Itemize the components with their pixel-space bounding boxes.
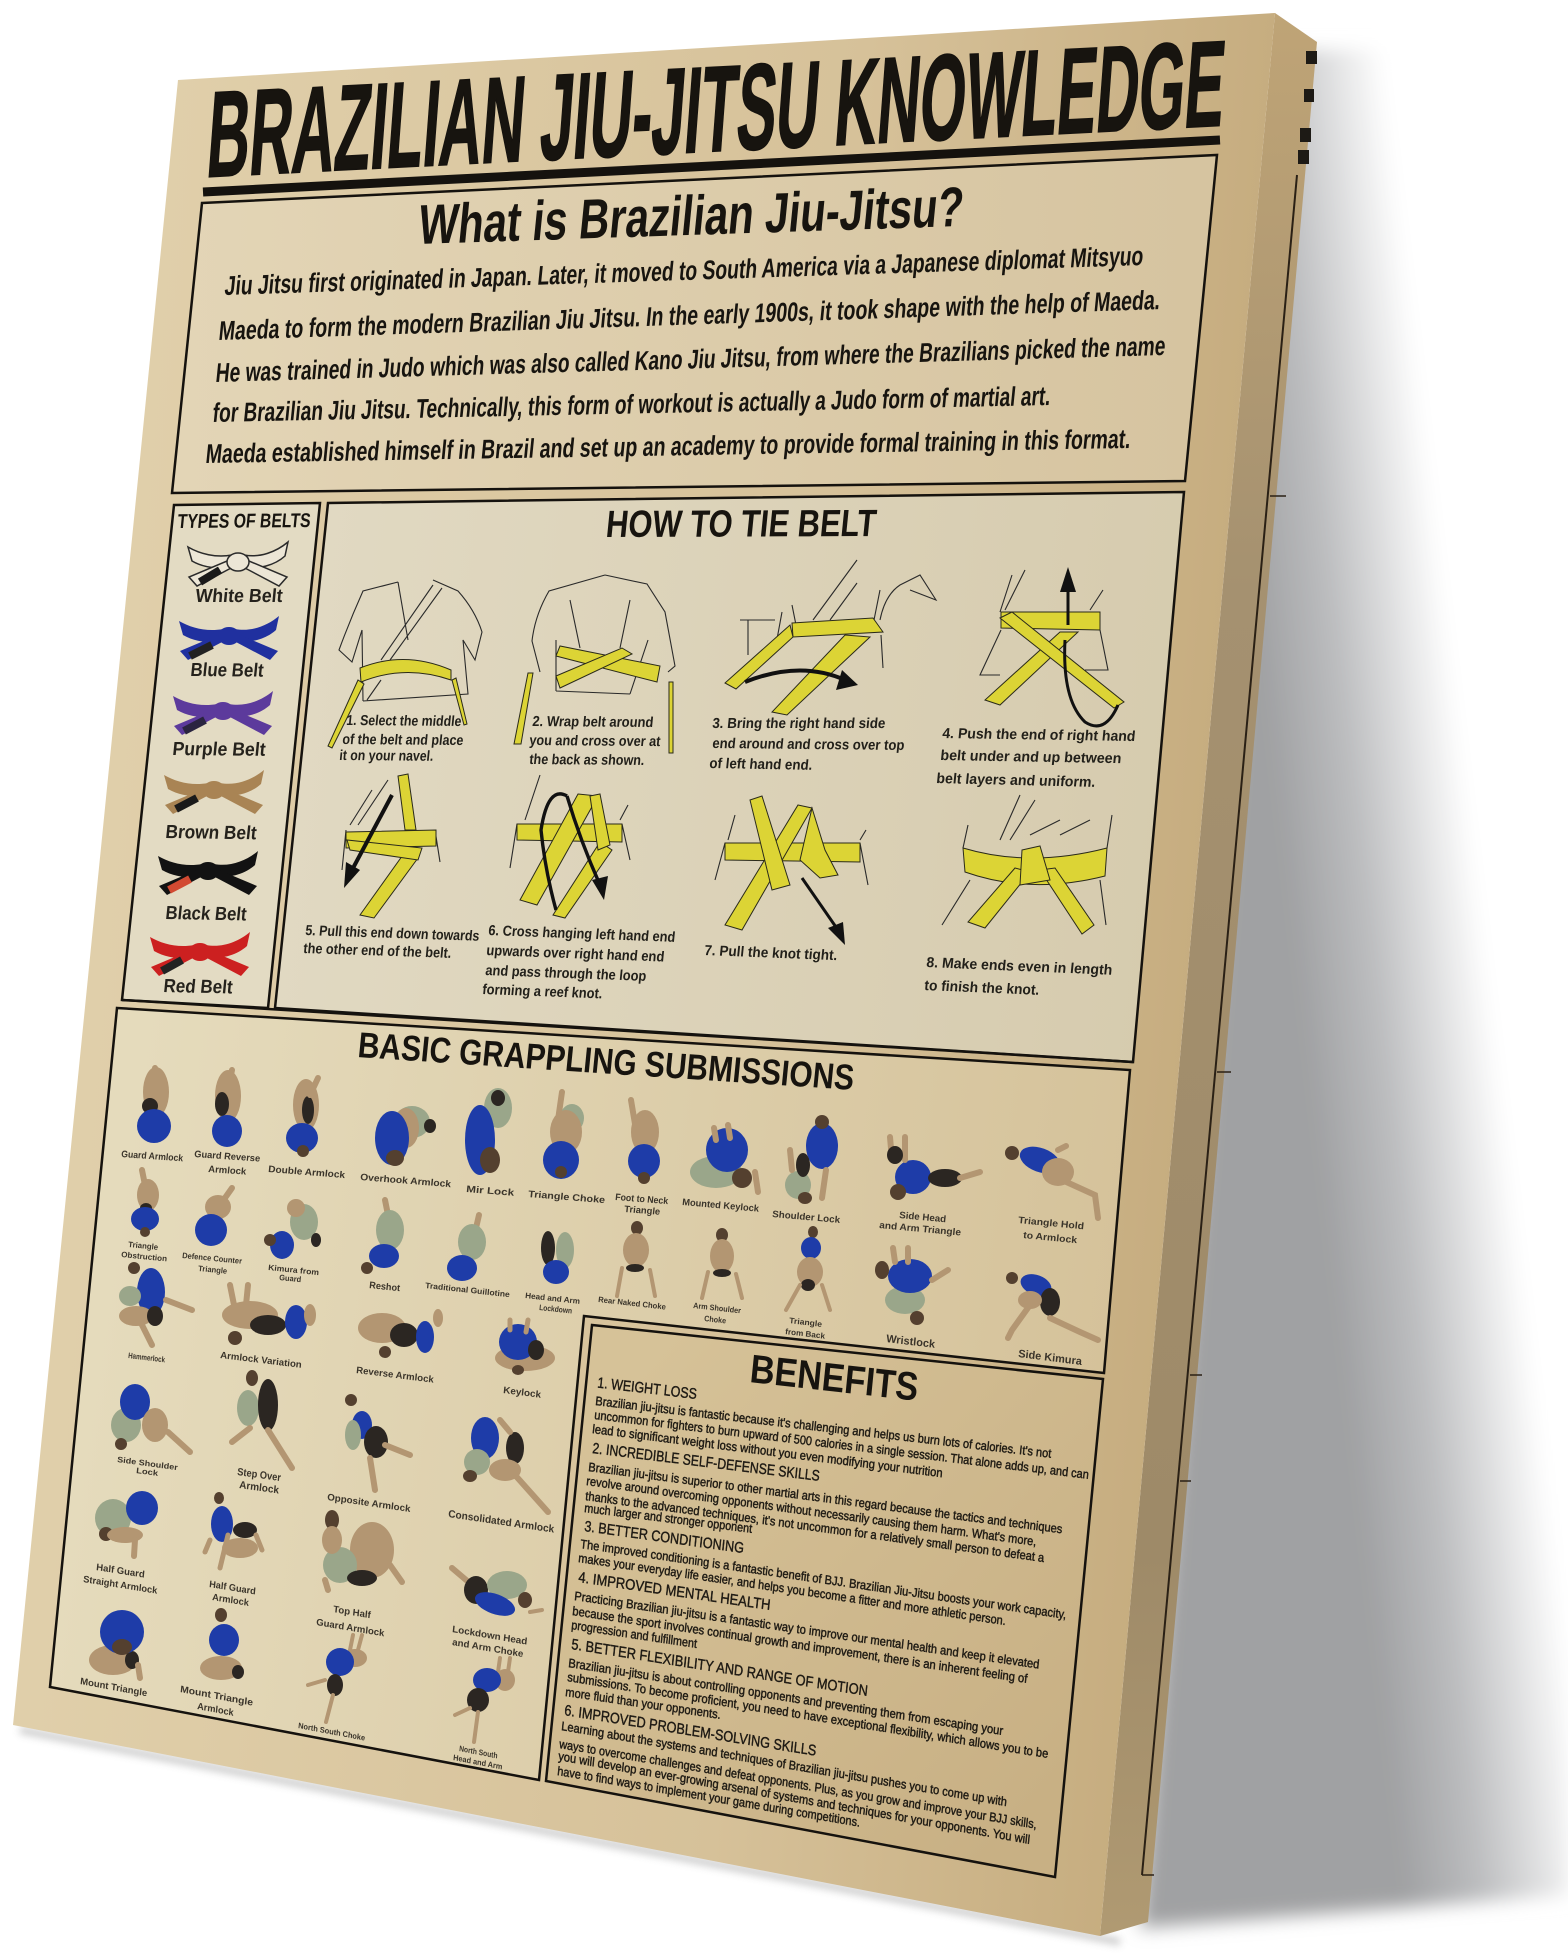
figure: shoulder lock [772,1115,841,1226]
figure: side kimura: Side Kimura [1018,1348,1083,1368]
figure: north south choke [298,1635,367,1743]
figure: guard reverse armlock: Armlock [208,1164,247,1178]
step 4 [936,567,1136,791]
figure: armlock variation: Armlock Variation [220,1350,302,1371]
benefit 5: submissions. To become proficient, you need to have exceptional flexibility, which allows you to be [567,1670,1049,1761]
panel: types of belts [122,503,320,1008]
step 2: you and cross over at [529,733,661,750]
step 4: belt layers and uniform. [936,771,1096,791]
figure: half guard straight armlock [83,1491,159,1597]
benefit 6 [557,1702,1037,1847]
figure: opposite armlock: Opposite Armlock [327,1492,412,1515]
benefit 1: Brazilian jiu-jitsu is fantastic because it's challenging and helps us burn lots of calories. It's not [595,1394,1053,1461]
step 3 [709,560,936,774]
figure: double armlock: Double Armlock [268,1164,346,1181]
figure: consolidated armlock [448,1417,555,1536]
figure: mount triangle armlock [180,1608,254,1719]
step 4: belt under and up between [940,748,1122,767]
belt: red: Red Belt [163,976,234,998]
paragraph: Maeda to form the modern Brazilian Jiu Jitsu. In the early 1900s, it took shape with the help of Maeda. [217,284,1162,346]
panel: how to tie belt [275,492,1184,1062]
heading: what is: What is Brazilian Jiu-Jitsu? [416,175,967,256]
figure: traditional guillotine: Traditional Guillotine [425,1281,511,1299]
figure: triangle hold to armlock: Triangle Hold [1018,1215,1085,1232]
benefit 6: 6. IMPROVED PROBLEM-SOLVING SKILLS [564,1702,817,1760]
figure: traditional guillotine [425,1215,511,1299]
step 8: to finish the knot. [924,978,1040,999]
benefit 6: Learning about the systems and techniques of Brazilian jiu-jitsu pushes you to come up with [561,1719,1008,1809]
figure: side head and arm triangle: and Arm Triangle [879,1220,961,1239]
benefit 2: revolve around overcoming opponents without necessarily causing them harm. What's more, [586,1474,1037,1549]
figure: mount triangle armlock: Mount Triangle [180,1684,254,1709]
figure: mir lock [465,1088,516,1199]
belt: brown: Brown Belt [164,822,258,844]
figure: rear naked choke [598,1221,667,1312]
figure: lockdown head and arm choke [452,1568,542,1660]
belt: purple [172,691,273,761]
figure: reverse armlock: Reverse Armlock [356,1365,435,1386]
figure: half guard armlock: Half Guard [209,1579,256,1598]
heading: types of belts: TYPES OF BELTS [177,510,312,533]
figure: hammerlock [119,1262,192,1364]
figure: foot to neck triangle [615,1100,669,1218]
paragraph: He was trained in Judo which was also called Kano Jiu Jitsu, from where the Brazilians picked the name [214,330,1167,388]
step 6: and pass through the loop [485,963,647,985]
benefit 3: 3. BETTER CONDITIONING [584,1518,745,1557]
benefit 4: 4. IMPROVED MENTAL HEALTH [578,1569,771,1614]
figure: defence counter triangle [182,1188,242,1276]
step 7 [704,796,868,964]
figure: hammerlock: Hammerlock [128,1351,166,1364]
figure: head and arm lockdown [525,1231,580,1316]
benefit 5: more fluid than your opponents. [565,1685,721,1722]
figure: arm shoulder choke: Arm Shoulder [693,1301,741,1315]
figure: arm shoulder choke [693,1228,742,1325]
benefit 2: Brazilian jiu-jitsu is superior to other martial arts in this regard because the tactics and techniques [588,1460,1063,1536]
belt: purple: Purple Belt [172,739,267,761]
heading: how to tie belt: HOW TO TIE BELT [604,503,878,546]
figure: overhook armlock [360,1106,452,1190]
step 3: end around and cross over top [712,736,905,754]
figure: lockdown head and arm choke: Lockdown Head [452,1624,528,1648]
step 2 [514,575,675,769]
figure: north south head and arm: North South [459,1744,498,1760]
step 5: the other end of the belt. [303,941,452,962]
figure: arm shoulder choke: Choke [704,1314,727,1325]
step 4: 4. Push the end of right hand [942,726,1136,745]
figure: side shoulder lock: Side Shoulder [117,1455,178,1472]
figure: foot to neck triangle: Triangle [624,1204,661,1218]
figure: half guard straight armlock: Straight Armlock [83,1574,159,1597]
figure: keylock: Keylock [503,1385,542,1401]
figure: step over armlock: Step Over [237,1466,281,1484]
figure: guard armlock [121,1067,184,1164]
benefit 3: The improved conditioning is a fantastic benefit of BJJ. Brazilian Jiu-Jitsu boosts your work capacity, [580,1537,1067,1622]
benefit 4: Practicing Brazilian jiu-jitsu is a fantastic way to improve our mental health and keep it elevated [574,1589,1040,1672]
figure: side head and arm triangle [879,1137,980,1239]
figure: triangle from back: from Back [785,1327,826,1341]
heading: grappling: BASIC GRAPPLING SUBMISSIONS [356,1024,856,1098]
step 8: 8. Make ends even in length [926,955,1113,979]
belt: black: Black Belt [164,903,248,925]
benefit 1: uncommon for fighters to burn upward of 500 calories in a single session. That alone adds up, and can [594,1408,1090,1482]
step 2: the back as shown. [529,752,645,769]
belt: brown [164,770,264,844]
benefit 5: 5. BETTER FLEXIBILITY AND RANGE OF MOTION [571,1636,869,1700]
paragraph: for Brazilian Jiu Jitsu. Technically, this form of workout is actually a Judo form of martial art. [211,380,1052,428]
figure: mounted keylock: Mounted Keylock [682,1197,760,1215]
belt: white: White Belt [195,586,284,607]
figure: lockdown head and arm choke: and Arm Choke [452,1637,524,1660]
step 5 [303,774,480,962]
figure: reverse armlock [356,1309,443,1386]
benefit 5: Brazilian jiu-jitsu is about controlling opponents and preventing them from escaping your [568,1656,1004,1738]
figure: reshot [361,1200,404,1294]
figure: triangle hold to armlock [1005,1142,1098,1246]
figure: wristlock [875,1248,948,1351]
step 8 [924,795,1113,999]
step 6: upwards over right hand end [486,943,665,966]
belt: red [150,932,250,998]
figure: reshot: Reshot [369,1280,401,1294]
figure: triangle from back [785,1226,830,1341]
paragraph: Maeda established himself in Brazil and set up an academy to provide formal training in this format. [204,423,1132,469]
benefit 4: progression and fulfillment [571,1618,698,1651]
step 1 [328,580,482,765]
figure: guard reverse armlock: Guard Reverse [194,1149,261,1165]
figure: top half guard armlock: Top Half [333,1604,372,1621]
figure: mount triangle armlock: Armlock [197,1701,235,1719]
step 3: 3. Bring the right hand side [712,716,886,732]
figure: mount triangle [80,1610,148,1699]
figure: north south choke: North South Choke [298,1721,366,1743]
step 6 [482,775,676,1002]
figure: keylock [495,1320,555,1401]
heading: benefits: BENEFITS [748,1347,920,1410]
figure: triangle from back: Triangle [789,1316,823,1329]
step 6: forming a reef knot. [482,982,603,1002]
figure: consolidated armlock: Consolidated Armlock [448,1508,555,1536]
step 1: 1. Select the middle [346,713,462,730]
figure: defence counter triangle: Defence Counter [182,1251,242,1266]
figure: half guard armlock: Armlock [212,1592,250,1609]
figure: guard reverse armlock [194,1070,261,1178]
belt: blue: Blue Belt [190,660,265,682]
step 5: 5. Pull this end down towards [305,923,480,945]
canvas front face [13,13,1275,1936]
figure: top half guard armlock: Guard Armlock [316,1617,386,1639]
figure: side kimura [1006,1270,1098,1368]
step 7: 7. Pull the knot tight. [704,943,838,964]
belt: white [188,542,288,607]
step 1: it on your navel. [339,748,434,765]
panel: basic grappling submissions [50,1000,1133,1780]
paragraph: Jiu Jitsu first originated in Japan. Later, it moved to South America via a Japanese diplomat Mitsyuo [223,240,1145,301]
figure: side head and arm triangle: Side Head [899,1210,947,1225]
figure: wristlock: Wristlock [886,1333,936,1351]
benefit 2 [584,1440,1063,1565]
step 6: 6. Cross hanging left hand end [488,923,676,946]
canvas side face [1100,13,1317,1936]
figure: opposite armlock [327,1394,412,1515]
benefit 2: 2. INCREDIBLE SELF-DEFENSE SKILLS [592,1440,821,1485]
benefit 1: lead to significant weight loss without you even modifying your nutrition [592,1422,943,1480]
benefit 2: much larger and stronger opponent [584,1501,753,1536]
figure: half guard straight armlock: Half Guard [96,1562,145,1581]
figure: top half guard armlock [316,1510,402,1639]
step 1: of the belt and place [342,732,464,749]
benefit 6: you will develop an ever-growing arsenal of systems and techniques for your opponents. You will [558,1749,1031,1847]
figure: double armlock [268,1078,346,1181]
figure: step over armlock: Armlock [239,1479,280,1497]
figure: north south head and arm: Head and Arm [453,1753,503,1772]
benefit 1: 1. WEIGHT LOSS [597,1375,698,1403]
figure: half guard armlock [205,1492,262,1609]
benefit 4: because the sport involves continual growth and improvement, there is an inherent feeling of [572,1604,1029,1686]
benefit 6: ways to overcome challenges and defeat opponents. Plus, as you grow and improve your BJJ skills, [558,1737,1037,1832]
figure: step over armlock [232,1370,292,1497]
figure: side shoulder lock [111,1384,190,1478]
figure: kimura from guard: Kimura from [268,1263,319,1277]
figure: defence counter triangle: Triangle [198,1264,228,1276]
figure: north south head and arm [453,1658,515,1772]
figure: triangle obstruct: Triangle [128,1240,159,1252]
benefit 3: makes your everyday life easier, and helps you become a fitter and more athletic person. [578,1551,1006,1628]
title rule [203,140,1220,192]
figure: triangle choke: Triangle Choke [528,1189,606,1206]
figure: triangle hold to armlock: to Armlock [1023,1230,1078,1246]
step 3: of left hand end. [709,756,813,774]
benefit 6: have to find ways to implement your game during competitions. [557,1764,861,1830]
panel: what is BJJ [172,155,1217,493]
figure: triangle choke [528,1092,606,1206]
figure: side shoulder lock: Lock [136,1466,159,1478]
figure: triangle obstruct [121,1170,168,1263]
belt: black [158,851,258,925]
figure: shoulder lock: Shoulder Lock [772,1209,841,1226]
paragraph [204,240,1167,469]
figure: head and arm lockdown: Lockdown [539,1303,573,1316]
figure: foot to neck triangle: Foot to Neck [615,1192,669,1207]
benefit 2: thanks to the advanced techniques, it's not uncommon for a relatively small person to defeat a [585,1489,1045,1565]
figure: head and arm lockdown: Head and Arm [525,1291,580,1306]
figure: guard armlock: Guard Armlock [121,1149,184,1164]
figure: rear naked choke: Rear Naked Choke [598,1295,667,1312]
figure: kimura from guard: Guard [279,1273,302,1284]
figure: overhook armlock: Overhook Armlock [360,1172,452,1190]
panel: benefits [546,1325,1103,1877]
figure: armlock variation [220,1285,316,1371]
step 2: 2. Wrap belt around [532,714,654,731]
belt: blue [179,616,279,682]
figure: triangle obstruct: Obstruction [121,1250,168,1263]
figure: mounted keylock [682,1125,760,1215]
figure: kimura from guard [264,1199,321,1284]
figure: mount triangle: Mount Triangle [80,1676,148,1699]
benefit 1 [592,1375,1090,1482]
figure: mir lock: Mir Lock [466,1184,516,1199]
